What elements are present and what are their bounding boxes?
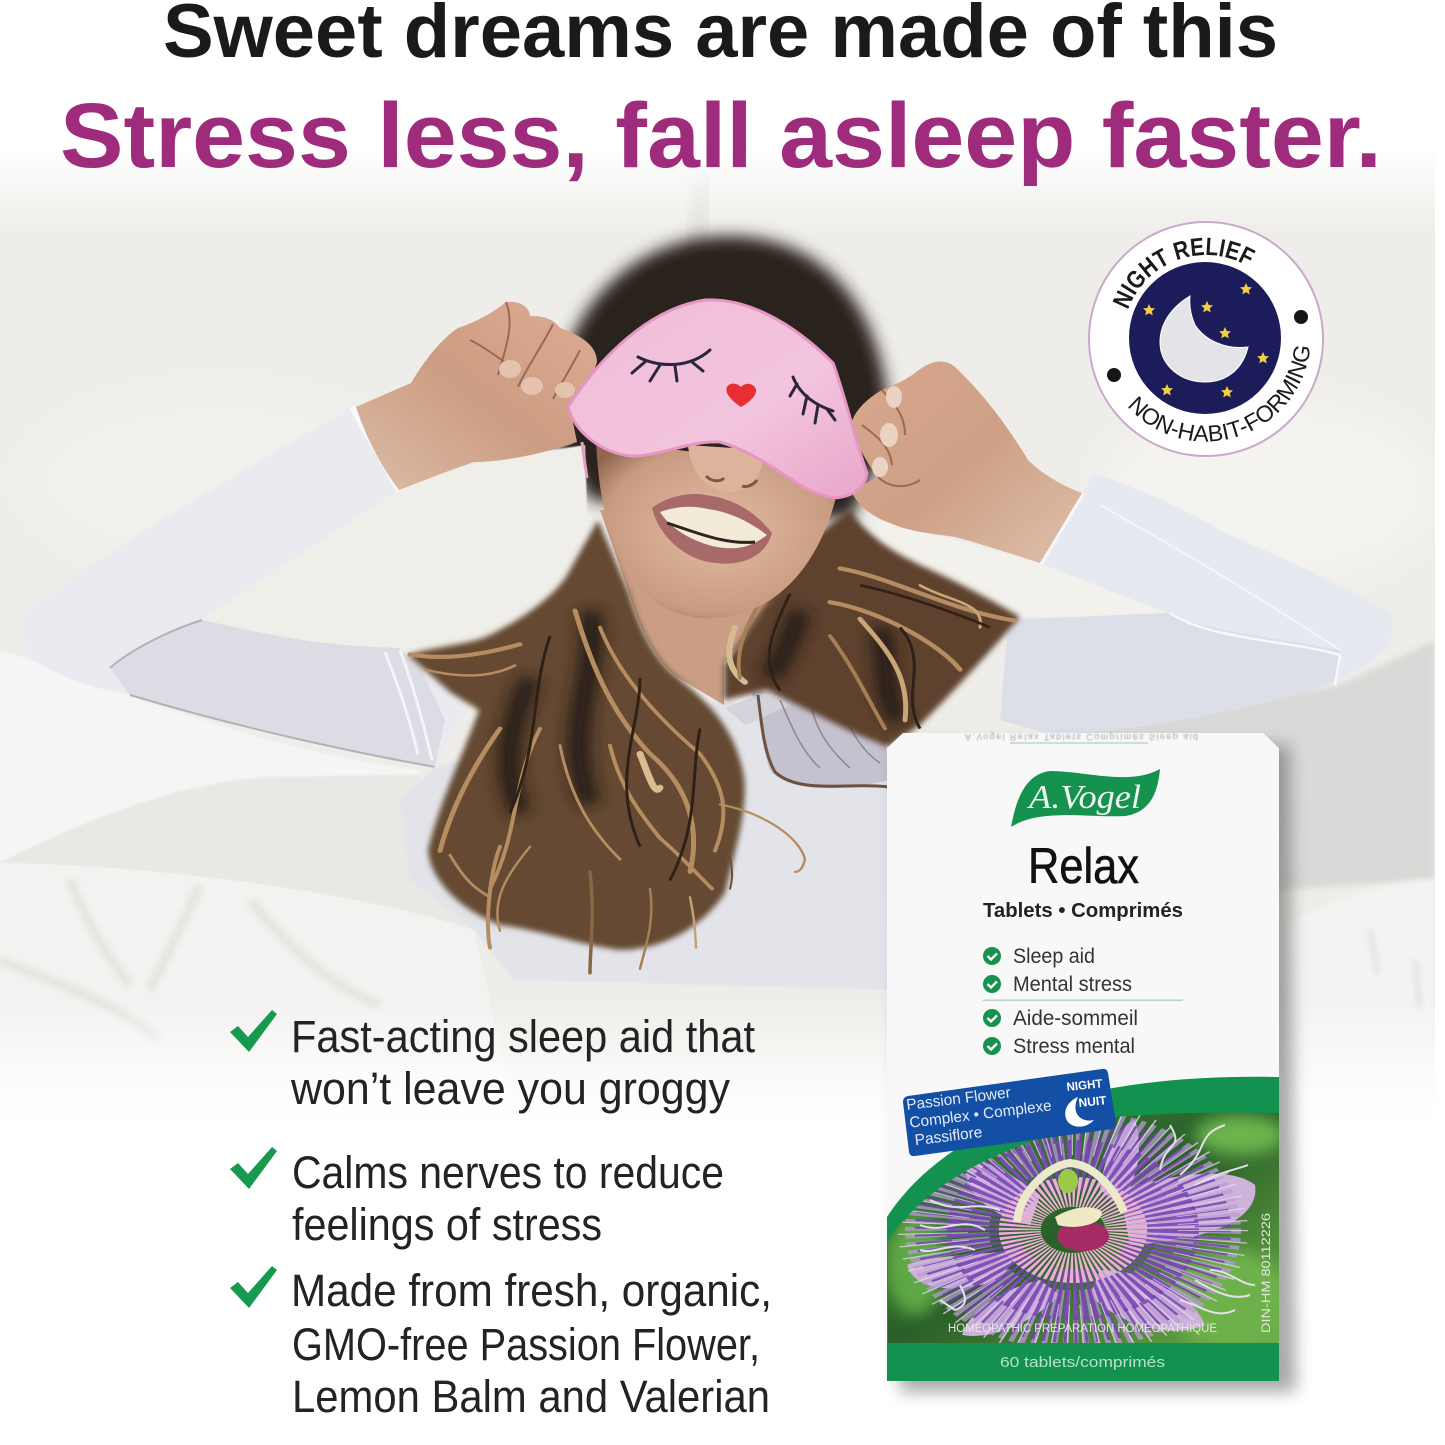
dark hair crown behind the head bbox=[555, 236, 890, 520]
smiling mouth bbox=[652, 494, 772, 564]
tablet count: 60 tablets/comprimés bbox=[1000, 1354, 1165, 1371]
dark hair shadows bbox=[509, 611, 900, 813]
lower-left pillow and duvet bbox=[0, 650, 520, 1130]
box face bbox=[887, 733, 1279, 1381]
fingertips over the mask bbox=[872, 386, 902, 477]
grey neckline patch bbox=[750, 690, 890, 788]
passion flower picture bbox=[888, 1112, 1279, 1343]
pink sleep mask bbox=[568, 300, 867, 498]
nose bbox=[688, 445, 763, 492]
blue passion flower tag: Complex • Complexe bbox=[909, 1097, 1053, 1132]
blue passion flower tag bbox=[903, 1069, 1116, 1156]
separator dots bbox=[1107, 310, 1308, 382]
white shirt torso bbox=[400, 690, 1050, 990]
check mark 3 bbox=[230, 1266, 277, 1308]
box check list: Aide-sommeil bbox=[1013, 1007, 1138, 1030]
ivory pillow under the head bbox=[202, 445, 590, 664]
benefits list bbox=[230, 1010, 772, 1422]
left hair mass bbox=[408, 520, 745, 950]
benefit 3 bbox=[291, 1265, 772, 1422]
upper arm in shade bbox=[110, 620, 445, 767]
benefit 3: Lemon Balm and Valerian bbox=[292, 1371, 770, 1422]
blue passion flower tag: Passiflore bbox=[914, 1124, 983, 1149]
product box: A.Vogel Relax bbox=[885, 732, 1296, 1392]
check icon stress mental bbox=[983, 1037, 1001, 1055]
right hand bbox=[852, 361, 1082, 563]
long brown hair bbox=[408, 510, 1020, 973]
benefit 3: GMO-free Passion Flower, bbox=[292, 1319, 760, 1370]
purple radial filaments bbox=[933, 1130, 1213, 1330]
pillow shading bbox=[20, 170, 1440, 1130]
title: second line: Stress less, fall asleep faster. bbox=[60, 85, 1382, 187]
benefit 3: Made from fresh, organic, bbox=[291, 1265, 772, 1316]
left hand bbox=[356, 302, 597, 490]
right closed eye with lashes bbox=[790, 377, 835, 423]
A.Vogel leaf logo: A.Vogel bbox=[1027, 779, 1141, 816]
upper arm in shade bbox=[1000, 613, 1340, 735]
dark hair strands bbox=[510, 585, 990, 880]
box check list: Sleep aid bbox=[1013, 945, 1095, 968]
flower centre bbox=[1057, 1221, 1109, 1251]
green curved band bbox=[887, 1077, 1279, 1381]
stars bbox=[1143, 283, 1269, 397]
box check list: Stress mental bbox=[1013, 1035, 1135, 1058]
check icon mental stress bbox=[983, 975, 1001, 993]
heart bbox=[726, 384, 756, 407]
light hair strands bbox=[410, 568, 1015, 973]
benefit 2: feelings of stress bbox=[292, 1199, 602, 1250]
hair strands bbox=[410, 568, 1015, 973]
petals bbox=[907, 1120, 1255, 1336]
navy night sky disc bbox=[1129, 262, 1281, 414]
neck and chest skin bbox=[600, 510, 815, 705]
box shadow bbox=[895, 745, 1296, 1392]
check mark 1 bbox=[230, 1010, 277, 1052]
check mark 2 bbox=[230, 1147, 277, 1189]
check icon aide-sommeil bbox=[983, 1009, 1001, 1027]
DIN number: DIN-HM 80112226 bbox=[1259, 1213, 1273, 1333]
benefit 2: Calms nerves to reduce bbox=[292, 1147, 724, 1198]
fade to white at the bottom bbox=[0, 1000, 1445, 1130]
crescent moon bbox=[1160, 296, 1248, 382]
benefit 1 bbox=[290, 1011, 755, 1114]
badge top text: NIGHT RELIEF bbox=[1112, 238, 1256, 309]
product form: Tablets • Comprimés bbox=[983, 900, 1183, 922]
badge bottom text: NON-HABIT-FORMING bbox=[1128, 346, 1310, 442]
right hair mass bbox=[724, 510, 1020, 747]
night label and moon bbox=[1065, 1076, 1108, 1127]
curly white filament tips bbox=[920, 1125, 1255, 1313]
check icon sleep aid bbox=[983, 947, 1001, 965]
badge: night relief, non-habit-forming bbox=[1088, 221, 1324, 457]
A.Vogel leaf logo bbox=[1011, 769, 1160, 827]
mask strap bbox=[582, 442, 587, 478]
left closed eye with lashes bbox=[632, 350, 710, 381]
benefit 1: won’t leave you groggy bbox=[290, 1063, 730, 1114]
box check list: Mental stress bbox=[1013, 973, 1132, 996]
fade to white at the top bbox=[0, 0, 1445, 235]
flap ghost text: A.Vogel Relax Tablets Comprimés Sleep aid bbox=[965, 732, 1198, 742]
white sleeve: right arm bbox=[1000, 473, 1393, 735]
night label and moon: NIGHT bbox=[1066, 1076, 1104, 1094]
product name: Relax bbox=[1028, 838, 1139, 894]
bottom green strip bbox=[887, 1343, 1279, 1381]
homeopathic strip text: HOMEOPATHIC PREPARATION HOMÉOPATHIQUE bbox=[948, 1322, 1217, 1335]
blue passion flower tag: Passion Flower bbox=[905, 1084, 1012, 1114]
night label and moon: NUIT bbox=[1078, 1093, 1108, 1110]
face bbox=[596, 440, 842, 618]
box check list bbox=[983, 945, 1183, 1058]
benefit 2 bbox=[292, 1147, 724, 1250]
white sleeve: left arm bbox=[22, 407, 470, 767]
benefit 1: Fast-acting sleep aid that bbox=[291, 1011, 755, 1062]
